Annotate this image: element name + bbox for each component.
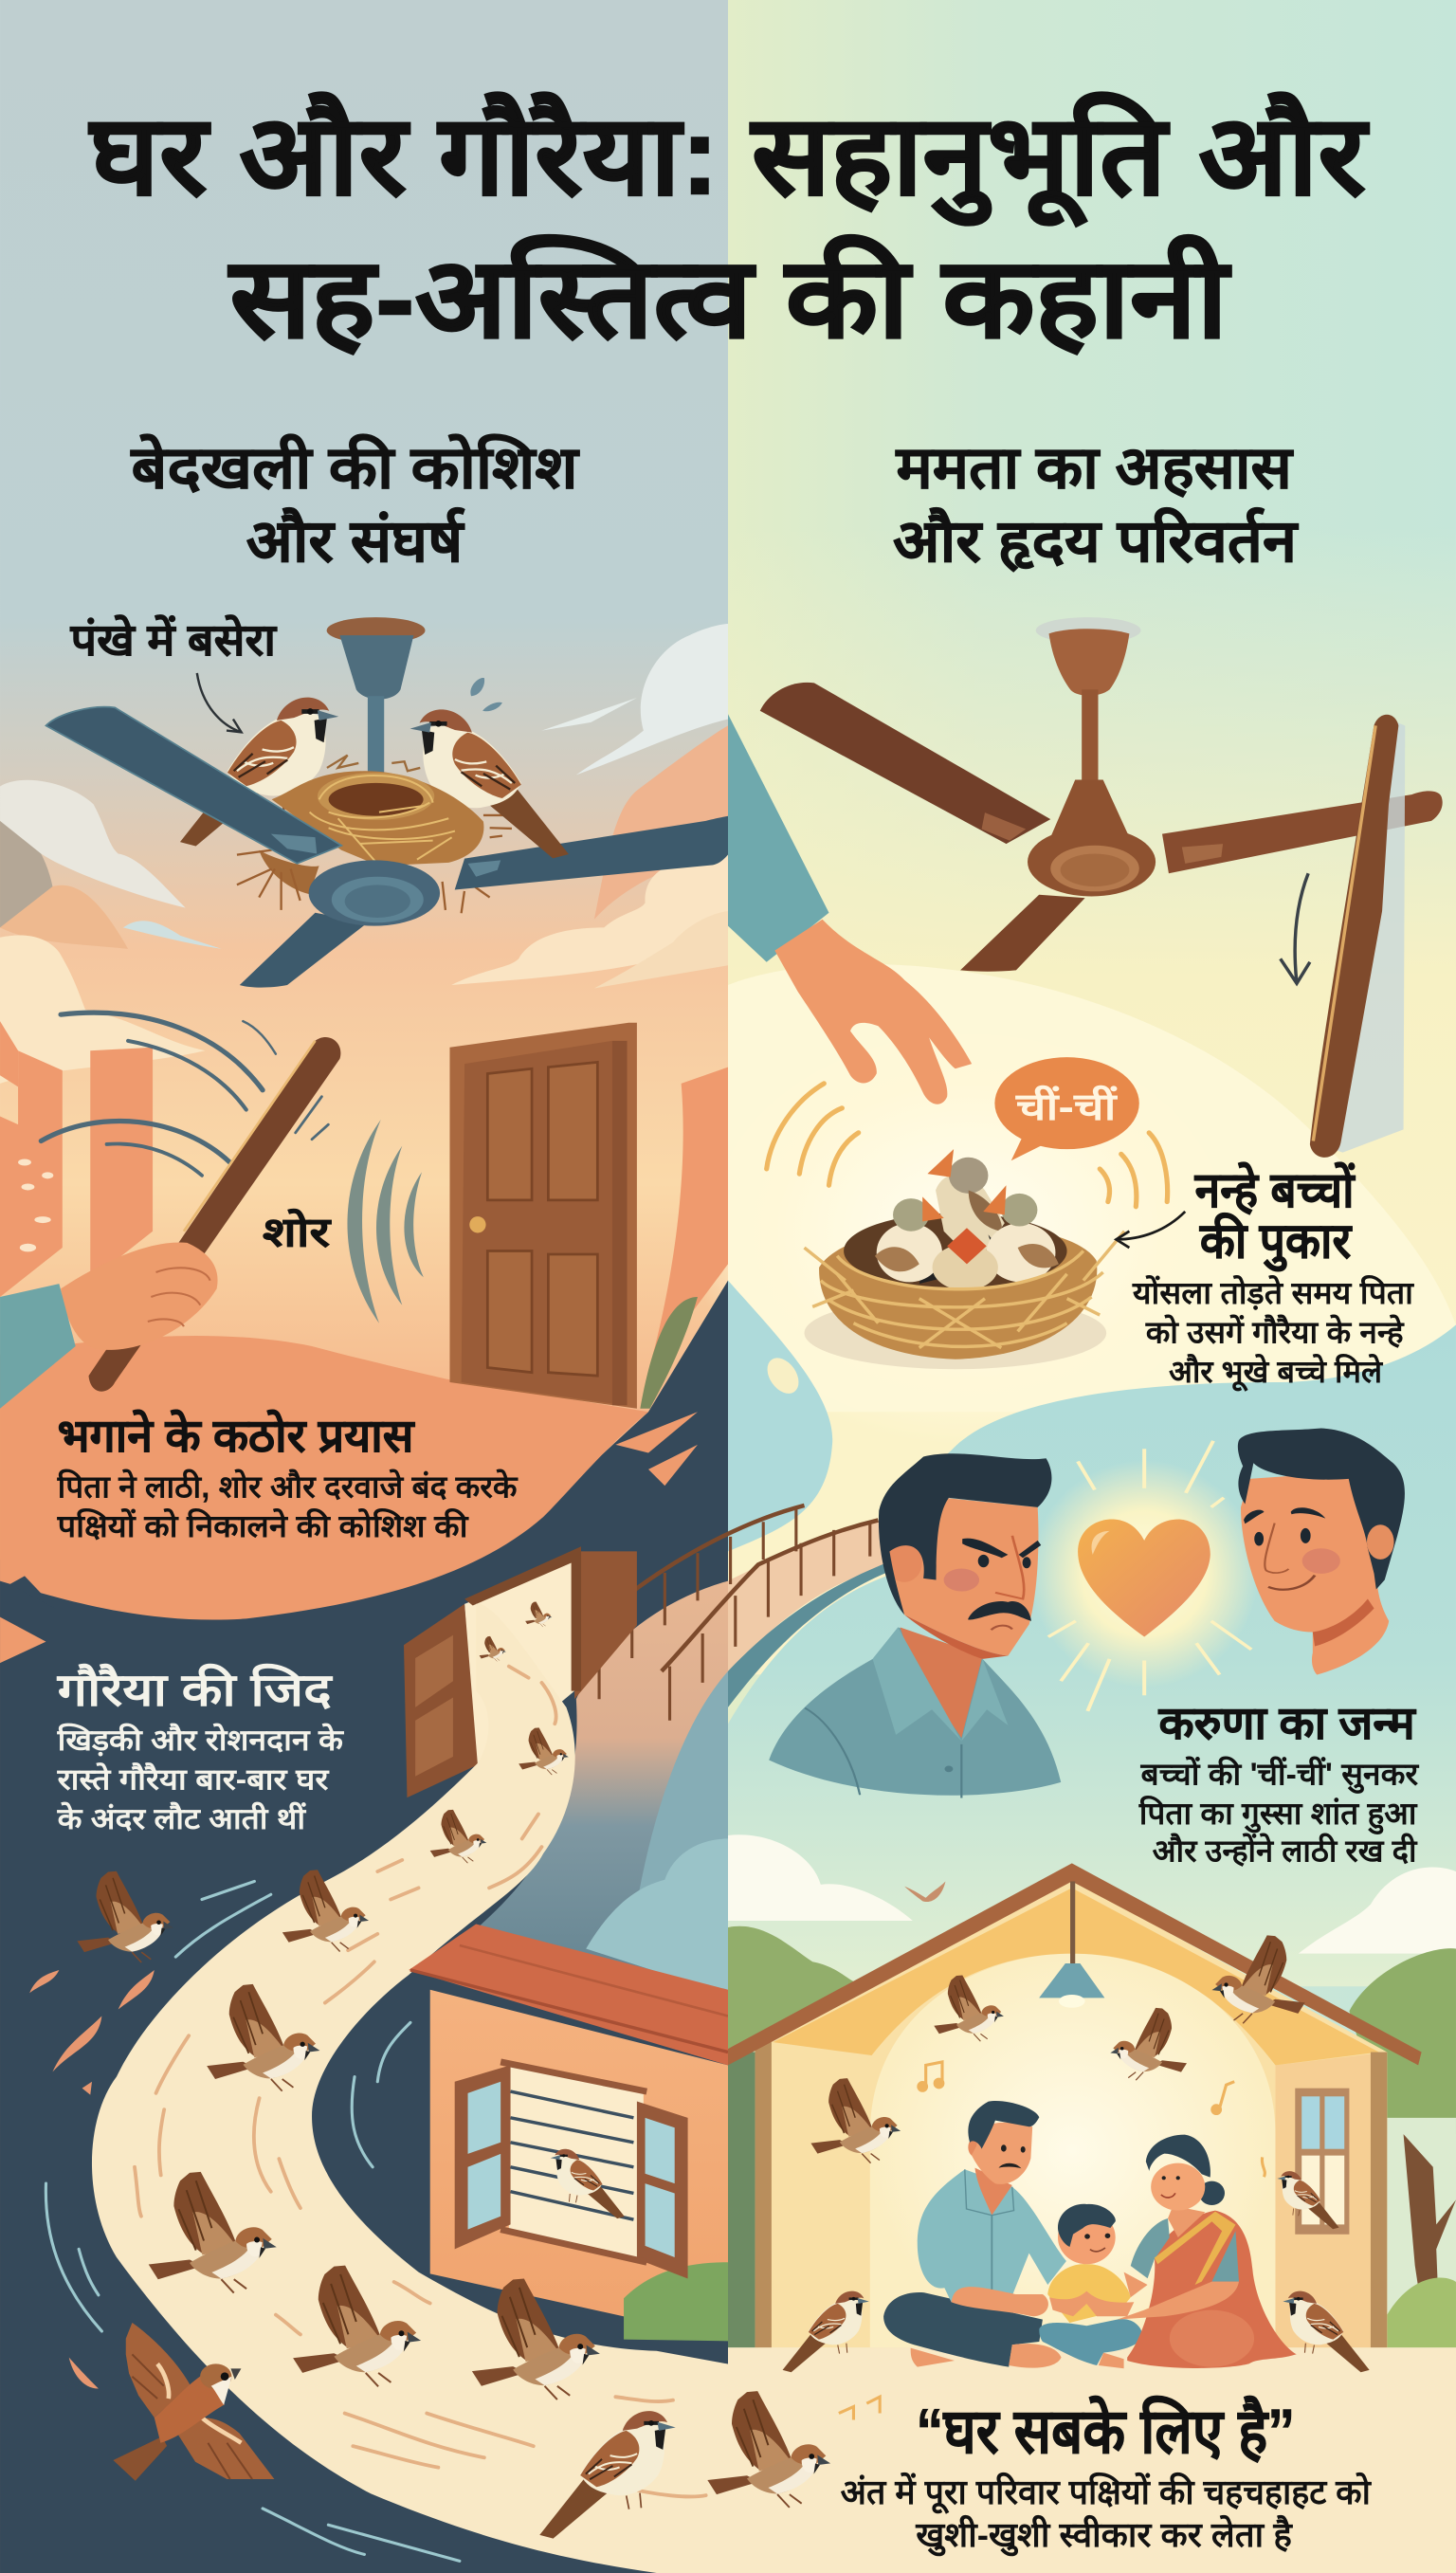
text block: birth of compassion: बच्चों की 'चीं-चीं' सुनकर [1139,1755,1420,1794]
icon: music notes [839,2062,1265,2419]
icon: fallen stick [1310,715,1405,1158]
icon: reaching hand [728,714,972,1104]
title: सह-अस्तित्व की कहानी [228,234,1231,360]
text block: harsh attempts: भगाने के कठोर प्रयास [58,1409,416,1462]
arrow: stick down [1281,873,1310,983]
mother figure [1117,2135,1297,2368]
illustration: family [883,2101,1297,2368]
icon: sparrow c [1110,2008,1187,2080]
label: chirp: चीं-चीं [1015,1085,1119,1128]
icon: sparrow d [810,2078,901,2163]
text block: sparrow persistence: खिड़की और रोशनदान के [57,1723,344,1757]
icon: nest tufts [237,815,512,913]
dark hill and bridge [476,1505,886,2028]
heading: left column: बेदखली की कोशिश [130,433,580,501]
right house [728,1863,1456,2364]
text block: babies call [1132,1161,1414,1392]
illustration: calm father [1238,1429,1405,1675]
icon: nest on fan [272,756,483,866]
text block: sparrow persistence [56,1663,344,1835]
icon: speech bubble [994,1057,1139,1160]
text block: birth of compassion: करुणा का जन्म [1158,1698,1417,1749]
icon: chicks [875,1149,1059,1290]
icon: sparrow 7 [293,2266,421,2386]
background buildings [0,1021,728,1371]
icon: sparrow 1 [77,1871,173,1962]
path motion dashes [135,1667,706,2496]
label: noise: शोर [263,1208,333,1255]
icon: motion lines [41,1013,328,1176]
heading: right column [893,435,1300,575]
illustration: angry father [769,1453,1061,1798]
icon: sparrow f [783,2291,869,2372]
child figure [1039,2204,1142,2368]
icon: house window [1295,2089,1349,2235]
arrow: to sparrow [197,673,242,732]
text block: closing quote: अंत में पूरा परिवार पक्षियों की चहचहाहट को [841,2472,1372,2514]
icon: wind strokes [46,1881,460,2561]
icon: sparrow 3 [430,1810,486,1863]
house sparrows [783,1881,1370,2372]
icon: sparrow 6 [149,2172,277,2293]
icon: sparrow e [1277,2171,1339,2229]
heading: right column: ममता का अहसास [895,435,1294,501]
father figure [883,2101,1066,2368]
text block: birth of compassion: और उन्होंने लाठी रख दी [1153,1833,1418,1869]
text block: birth of compassion: पिता का गुस्सा शांत हुआ [1138,1795,1418,1834]
icon: right sparrow [410,709,569,858]
icon: feathers [18,1159,53,1251]
icon: sparrow b [1211,1935,1305,2023]
icon: sparrow 13 [525,1602,552,1627]
icon: baby chick nest [805,1149,1124,1369]
text block: babies call: योंसला तोड़ते समय पिता [1132,1274,1414,1310]
heading: left column [130,433,580,575]
icon: right ceiling fan [760,617,1443,972]
trees behind right house [728,1926,1456,2347]
icon: stick and hand [0,1037,340,1409]
text block: sparrow persistence: गौरैया की जिद [56,1663,333,1716]
left house [409,1924,728,2341]
icon: sparrow 9 [113,2323,274,2481]
text block: closing quote [841,2396,1372,2557]
icon: distant sparrow [904,1881,945,1902]
open door on path [404,1546,637,1797]
icon: sparrow 10 [539,2411,676,2539]
icon: sparrow 12 [480,1636,506,1661]
icon: right clouds [728,1834,1456,1954]
sparrow path [92,1604,1456,2573]
icon: glowing heart [1030,1441,1259,1711]
icon: left sparrow [180,698,338,847]
title: घर और गौरैया: सहानुभूति और [88,91,1370,227]
text block: harsh attempts: पक्षियों को निकालने की कोशिश की [57,1507,469,1543]
text block: closing quote: “घर सबके लिए है” [916,2396,1295,2466]
icon: sparrow 4 [519,1727,569,1775]
icon: hanging lamp [1039,1963,1104,2008]
panel: right background [689,0,1456,2573]
icon: sparrow a [934,1975,1004,2041]
text block: closing quote: खुशी-खुशी स्वीकार कर लेता है [915,2514,1294,2557]
icon: sparrow 5 [207,1984,319,2091]
icon: falling leaves [29,1970,155,2389]
icon: sound waves [347,1120,424,1323]
text block: babies call: को उसगें गौरैया के नन्हे [1145,1313,1405,1349]
heading: left column: और संघर्ष [246,507,464,575]
arrow: to chicks [1117,1212,1185,1248]
heading: right column: और हृदय परिवर्तन [893,507,1300,575]
floor [728,2347,1456,2364]
title [88,91,1370,360]
panel: left background [0,0,728,2573]
icon: barred window [455,2062,688,2279]
text block: harsh attempts: पिता ने लाठी, शोर और दरवाजे बंद करके [57,1468,519,1504]
text block: sparrow persistence: के अंदर लौट आती थीं [57,1801,307,1835]
flying sparrows along path [77,1602,830,2539]
icon: sparrow 11 [707,2391,830,2508]
left ground and dark storm [0,1281,728,2573]
icon: sparrow 2 [282,1870,369,1951]
label: fan nest: पंखे में बसेरा [69,614,278,665]
icon: left ceiling fan with nest and sparrows [46,617,729,988]
icon: chirp arcs [767,1084,1168,1207]
text block: birth of compassion [1138,1698,1420,1869]
text block: babies call: नन्हे बच्चों [1194,1161,1356,1218]
left scene clouds [0,624,728,1084]
text block: babies call: और भूखे बच्चे मिले [1169,1353,1384,1392]
text block: sparrow persistence: रास्ते गौरैया बार-बार घर [57,1761,330,1796]
text block: babies call: की पुकार [1199,1212,1353,1271]
icon: door [449,1023,637,1409]
icon: sparrow 8 [472,2278,600,2400]
right mid wave and sky [728,1281,1456,1986]
icon: sparrow g [1283,2291,1370,2372]
text block: harsh attempts [57,1409,519,1543]
